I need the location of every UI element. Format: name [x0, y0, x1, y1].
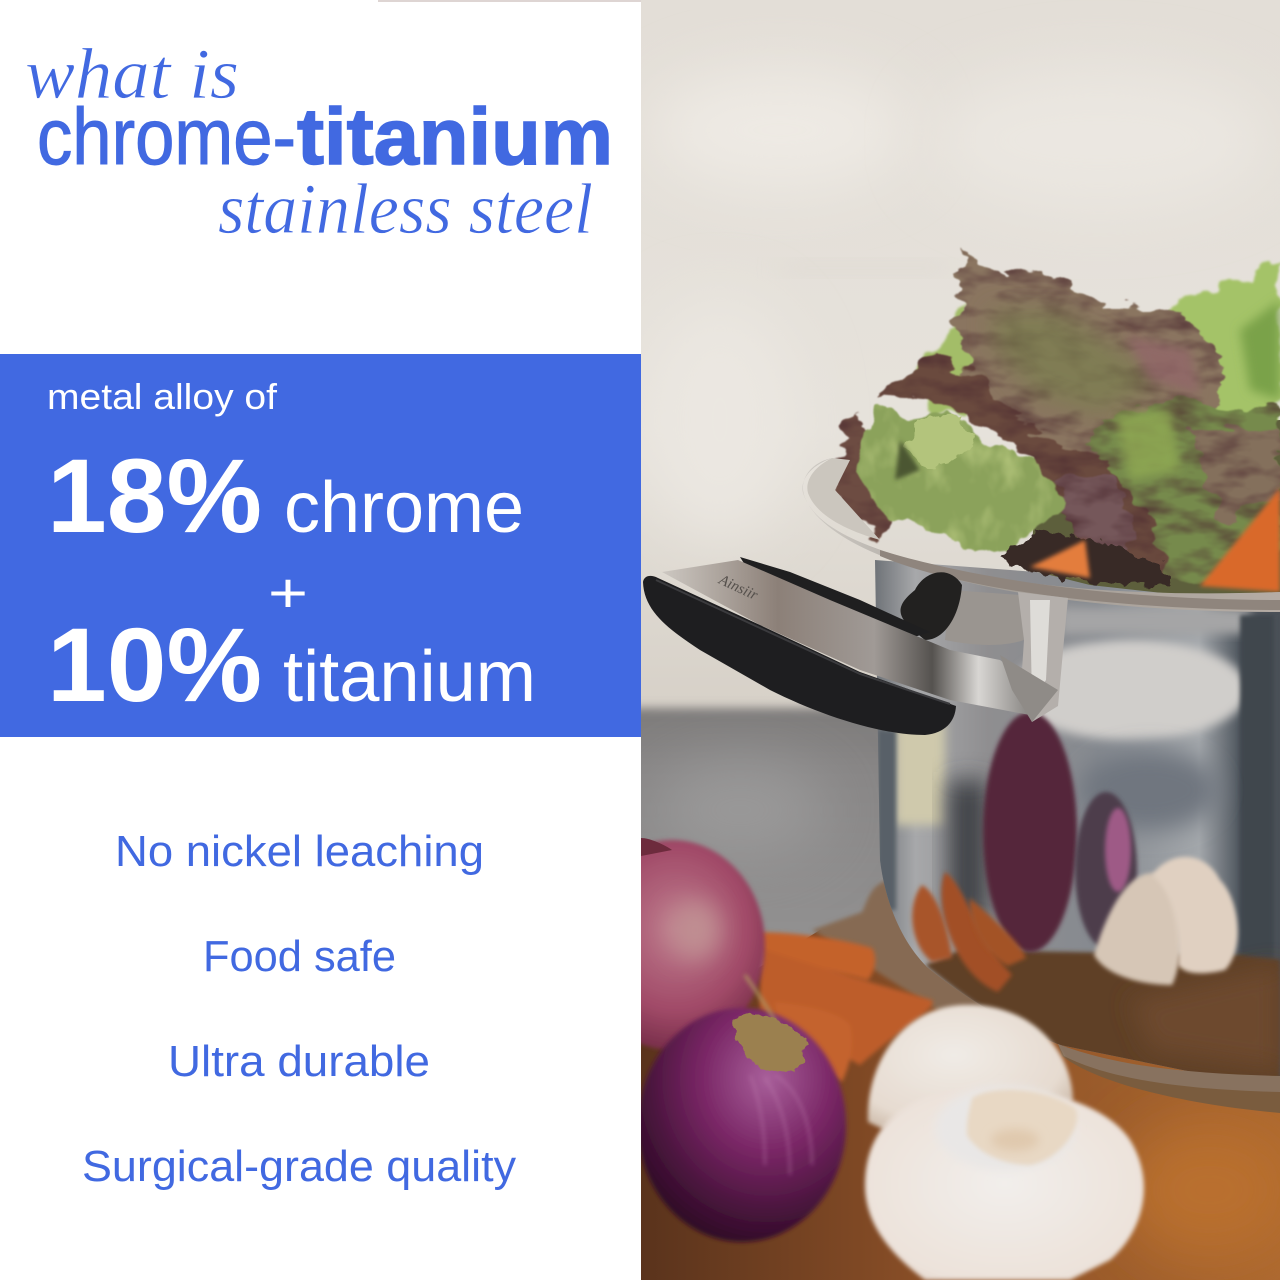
- plus sign: +: [268, 561, 308, 624]
- stat: 18 percent chrome: 18%: [47, 438, 262, 555]
- alloy intro text: metal alloy of: [47, 376, 278, 417]
- wall background: [640, 0, 1280, 720]
- carrot: middle: [760, 948, 933, 1065]
- mushroom: stem: [967, 1090, 1077, 1165]
- stat: 18 percent chrome: chrome: [284, 468, 524, 548]
- lettuce: green front leaf: [855, 405, 1062, 556]
- pot reflection: shallots: [983, 712, 1077, 952]
- carrot: back: [755, 932, 875, 980]
- benefit: food safe: Food safe: [203, 932, 396, 981]
- handle: steel top: [662, 560, 1048, 715]
- lettuce: right mixed leaves: [1080, 400, 1280, 585]
- title emphasis: titanium: titanium: [297, 92, 613, 181]
- lettuce: shaded base mass: [1030, 420, 1280, 596]
- pot reflection: mushrooms: [1094, 873, 1181, 985]
- wooden table: [641, 930, 1280, 1280]
- carrot: front: [805, 1032, 852, 1083]
- mushroom: gills shadow: [947, 1098, 970, 1116]
- benefit: surgical-grade quality: Surgical-grade quality: [82, 1142, 516, 1191]
- lettuce: dark red front leaf: [882, 355, 1170, 580]
- cutting board: [812, 880, 984, 1010]
- mushroom: front: [865, 1086, 1144, 1280]
- carrot pieces in pot: [1030, 488, 1280, 592]
- pot reflection: carrots: [912, 885, 952, 962]
- pot reflection: highlight: [1012, 640, 1248, 740]
- onion: purple: [638, 975, 846, 1242]
- pot handle: [643, 557, 1068, 735]
- handle: black thin upper strip: [740, 557, 930, 640]
- pot rim: [802, 458, 1280, 612]
- lettuce: dark base: [1000, 530, 1170, 585]
- handle: bracket: [945, 590, 1024, 645]
- onion: pink: [641, 838, 767, 1051]
- lettuce: red main leaf: [958, 248, 1220, 470]
- dark floor background: [641, 702, 884, 938]
- panel: metal alloy composition: [0, 354, 641, 737]
- benefit: no nickel leaching: No nickel leaching: [115, 827, 484, 876]
- onion: dried root tuft: [732, 1015, 805, 1072]
- carrots on table: [755, 932, 933, 1082]
- handle: engraved brand mark: Ainsiir: [715, 572, 760, 604]
- mushroom: back: [868, 1005, 1073, 1130]
- benefits list: [82, 827, 516, 1191]
- pot reflection: wood base: [924, 948, 1280, 1076]
- title line: what is: what is: [25, 34, 239, 114]
- pot body: [875, 560, 1280, 1095]
- benefit: ultra durable: Ultra durable: [168, 1037, 430, 1086]
- lettuce: [835, 248, 1280, 596]
- stat: 10 percent titanium: titanium: [283, 637, 536, 717]
- stat: 10 percent titanium: 10%: [47, 607, 262, 724]
- lettuce: green back leaves: [1168, 260, 1280, 420]
- stat: 18 percent chrome: [47, 438, 524, 555]
- wooden trivet: [1058, 1044, 1280, 1113]
- page background: [0, 0, 641, 1280]
- stat: 10 percent titanium: [47, 607, 536, 724]
- photo panel: pot with vegetables: [579, 0, 1280, 1280]
- top edge sliver: [378, 0, 641, 2]
- title line: chrome-: chrome-: [37, 92, 296, 181]
- title: [25, 34, 613, 249]
- title line: stainless steel: stainless steel: [218, 169, 593, 249]
- handle: black grip: [643, 576, 956, 735]
